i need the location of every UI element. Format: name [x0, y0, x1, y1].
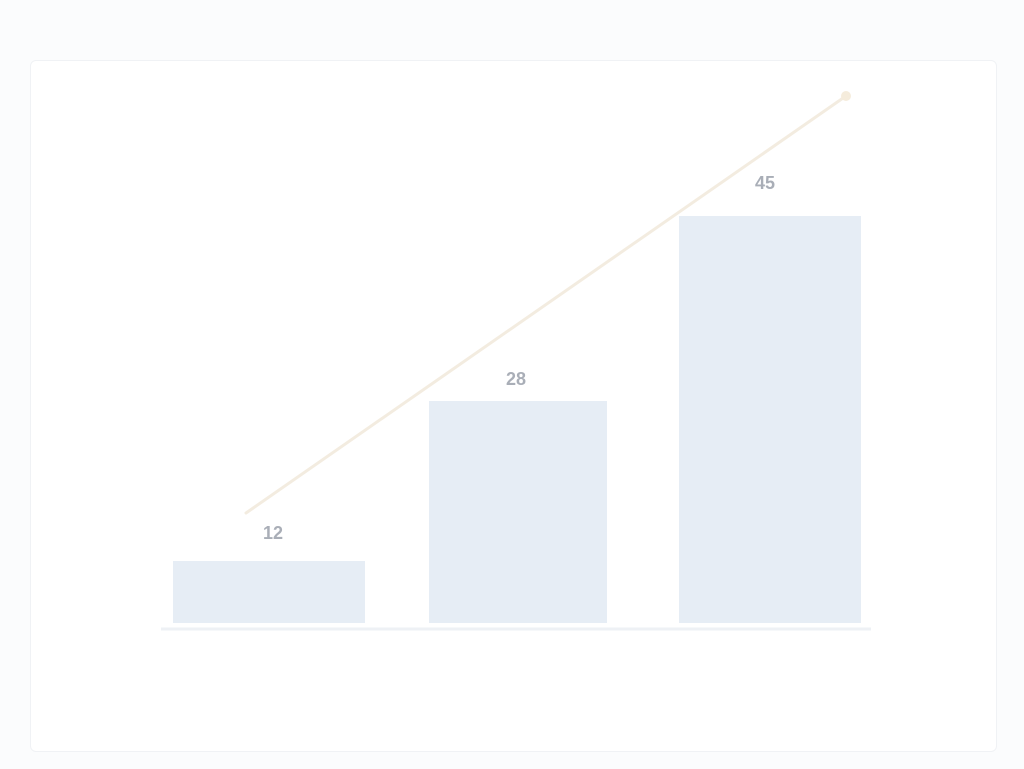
- value label: bar 1: 12: [263, 523, 283, 543]
- value label: bar 3: 45: [755, 173, 775, 193]
- bar: medium: [429, 401, 607, 623]
- trend line arrow: [246, 91, 851, 513]
- value label: bar 2: 28: [506, 369, 526, 389]
- baseline: [161, 628, 871, 630]
- bar: small: [173, 561, 365, 623]
- bar: large: [679, 216, 861, 623]
